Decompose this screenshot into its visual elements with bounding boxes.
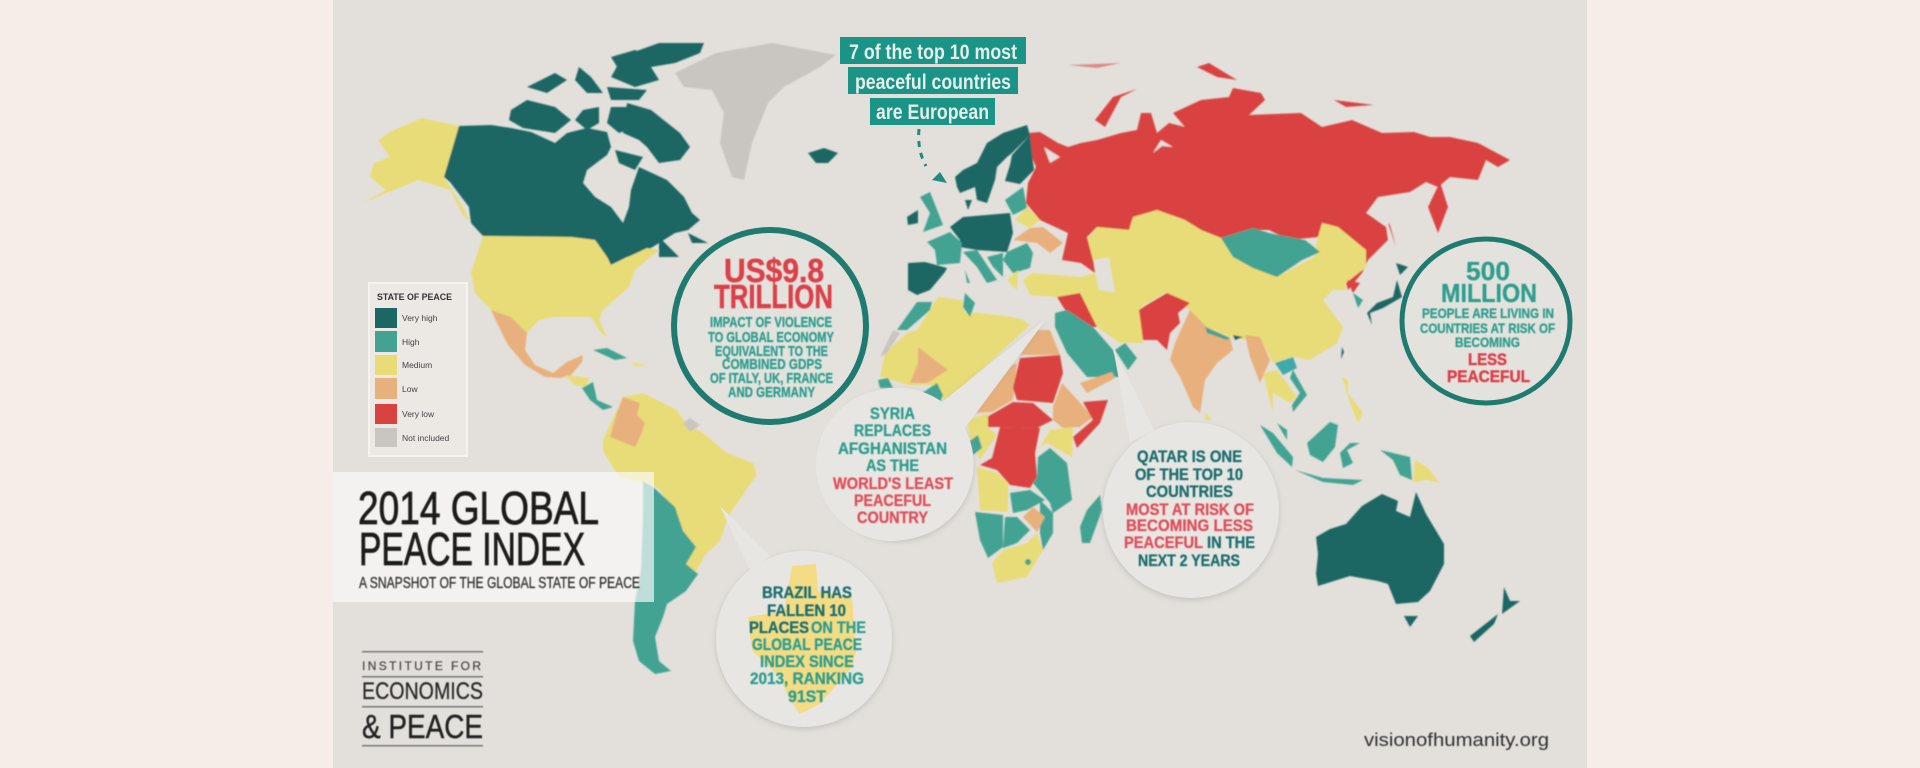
callout circle: 500 million: PEOPLE ARE LIVING IN — [1422, 305, 1554, 321]
callout circle: 500 million: MILLION — [1441, 278, 1537, 308]
callout circle: 500 million — [1402, 239, 1570, 403]
callout bubble: Syria: AFGHANISTAN — [838, 439, 947, 458]
legend: state of peace: STATE OF PEACE — [377, 292, 452, 303]
logo: Institute for Economics and Peace — [362, 651, 483, 746]
callout bubble: Qatar: PEACEFUL — [1124, 533, 1203, 552]
callout circle: 500 million: LESS — [1468, 350, 1507, 369]
arrow: to Europe — [919, 129, 947, 183]
callout circle: US$9.8 trillion: COMBINED GDPS — [722, 356, 822, 373]
callout bubble: Syria: COUNTRY — [857, 508, 929, 527]
callout bubble: Qatar: QATAR IS ONE — [1137, 447, 1242, 466]
callout bubble: Qatar: OF THE TOP 10 — [1135, 465, 1243, 484]
callout bubble: Brazil: PLACES — [749, 618, 809, 637]
callout: top 10 European: are European — [876, 101, 989, 124]
callout bubble: Qatar: COUNTRIES — [1146, 482, 1233, 501]
callout bubble: Brazil — [716, 506, 892, 727]
callout bubble: Syria: PEACEFUL — [854, 491, 931, 510]
callout circle: US$9.8 trillion: OF ITALY, UK, FRANCE — [710, 370, 833, 387]
callout bubble: Syria: SYRIA — [870, 404, 915, 423]
callout bubble: Brazil: GLOBAL PEACE — [752, 635, 862, 654]
paper background panel — [333, 0, 1587, 768]
Africa — [878, 293, 1108, 583]
title panel — [333, 472, 654, 602]
legend: state of peace: Very high — [402, 313, 438, 323]
legend: state of peace: Very low — [402, 409, 435, 419]
callout bubble: Brazil: INDEX SINCE — [760, 652, 854, 671]
callout: top 10 European: 7 of the top 10 most — [849, 41, 1017, 64]
callout circle: 500 million: COUNTRIES AT RISK OF — [1420, 320, 1555, 336]
world map — [362, 43, 1520, 674]
Indonesia and Oceania — [1260, 422, 1520, 642]
logo: Institute for Economics and Peace: & PEACE — [362, 708, 483, 745]
callout bubble: Syria — [816, 318, 1047, 541]
callout circle: US$9.8 trillion: US$9.8 — [724, 252, 824, 289]
title text: PEACE INDEX — [359, 523, 585, 575]
callout circle: US$9.8 trillion — [674, 230, 866, 422]
callout bubble: Qatar: BECOMING LESS — [1126, 516, 1253, 535]
title text — [358, 482, 599, 575]
callout bubble: Qatar: IN THE — [1207, 533, 1255, 552]
callout circle: US$9.8 trillion: EQUIVALENT TO THE — [715, 343, 828, 360]
callout circle: 500 million: 500 — [1466, 256, 1510, 286]
legend: state of peace: Medium — [402, 360, 432, 370]
legend: state of peace — [369, 283, 467, 456]
South America — [603, 393, 757, 674]
North America — [362, 43, 838, 410]
callout bubble: Qatar: NEXT 2 YEARS — [1138, 551, 1240, 570]
website URL: visionofhumanity.org — [1364, 730, 1549, 750]
callout circle: 500 million: BECOMING — [1455, 334, 1520, 350]
callout bubble: Qatar: MOST AT RISK OF — [1126, 500, 1254, 519]
Asia — [1023, 210, 1408, 423]
callout bubble: Syria: WORLD'S LEAST — [833, 474, 954, 493]
callout bubble: Brazil: FALLEN 10 — [767, 601, 846, 620]
title text: 2014 GLOBAL — [358, 482, 599, 534]
callout: top 10 European — [840, 37, 1026, 125]
callout: top 10 European: peaceful countries — [855, 71, 1011, 94]
Russia — [1026, 63, 1510, 290]
callout circle: US$9.8 trillion: TO GLOBAL ECONOMY — [708, 329, 834, 346]
legend: state of peace: Not included — [402, 433, 450, 443]
callout circle: US$9.8 trillion: IMPACT OF VIOLENCE — [710, 314, 832, 331]
callout bubble: Brazil: 91ST — [788, 687, 827, 706]
callout bubble: Syria: REPLACES — [854, 421, 931, 440]
callout circle: 500 million: PEACEFUL — [1447, 367, 1530, 386]
callout bubble: Brazil: ON THE — [811, 618, 866, 637]
callout bubble: Qatar — [1103, 347, 1279, 598]
callout bubble: Brazil: BRAZIL HAS — [762, 583, 852, 602]
callout bubble: Brazil: 2013, RANKING — [750, 669, 864, 688]
Europe — [907, 125, 1063, 295]
callout circle: US$9.8 trillion: AND GERMANY — [728, 384, 815, 401]
legend: state of peace: Low — [402, 384, 418, 394]
callout circle: US$9.8 trillion: TRILLION — [714, 278, 833, 315]
logo: Institute for Economics and Peace: INSTITUTE FOR — [362, 659, 481, 673]
logo: Institute for Economics and Peace: ECONOMICS — [362, 678, 483, 705]
callout bubble: Syria: AS THE — [866, 456, 919, 475]
legend: state of peace: High — [402, 337, 420, 347]
subtitle: A SNAPSHOT OF THE GLOBAL STATE OF PEACE — [359, 575, 640, 592]
